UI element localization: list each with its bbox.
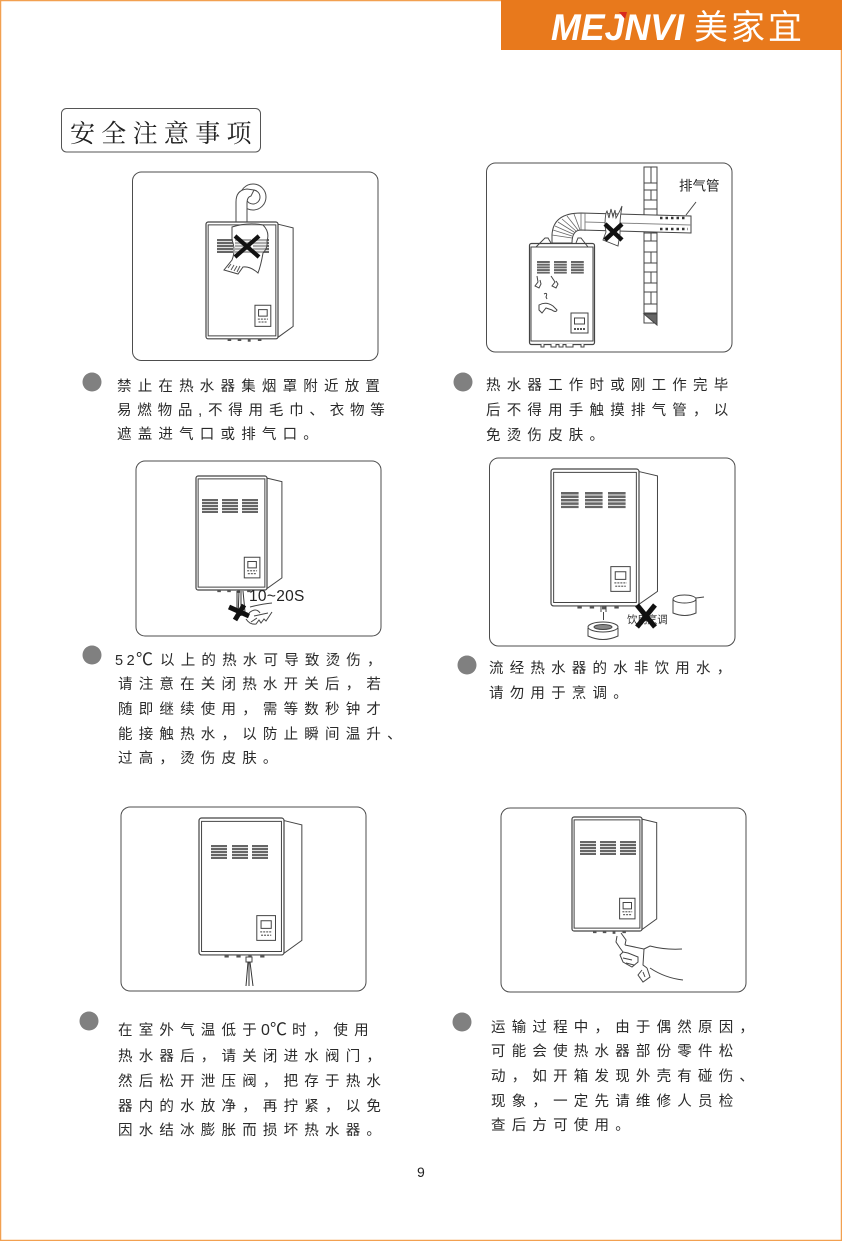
note 6 <box>452 1012 760 1134</box>
note 3: 以上的热水可导致烫伤， <box>160 652 388 669</box>
logo accent <box>619 12 627 19</box>
icon: brick wall <box>644 167 657 325</box>
note 6: 可能会使热水器部份零件松 <box>491 1043 739 1060</box>
note 3: 请注意在关闭热水开关后，若 <box>118 675 387 693</box>
note 6: 现象，一定先请维修人员检 <box>491 1093 739 1110</box>
note 6: 查后方可使用。 <box>491 1117 636 1134</box>
bullet <box>458 656 476 674</box>
icon: prohibition cross <box>605 224 622 240</box>
vents <box>217 239 269 253</box>
note 5: 器内的水放净，再拧紧，以免 <box>118 1098 387 1115</box>
note 5: 然后松开泄压阀，把存于热水 <box>118 1073 387 1090</box>
note 2 <box>454 372 734 444</box>
icon: heater <box>196 476 282 593</box>
note 3 <box>82 646 408 767</box>
vents <box>561 492 626 508</box>
icon: prohibition cross <box>637 605 655 627</box>
note 3: 随即继续使用，需等数秒钟才 <box>118 700 387 718</box>
bullet <box>452 1012 472 1032</box>
bullet <box>82 646 102 664</box>
note 1: 禁止在热水器集烟罩附近放置 <box>117 378 386 395</box>
note 2: 免烫伤皮肤。 <box>486 427 610 444</box>
note 2: 后不得用手触摸排气管，以 <box>486 402 734 419</box>
icon: draining water <box>246 957 253 986</box>
brand header <box>501 0 842 50</box>
icon: flue <box>236 184 266 222</box>
note 3: ℃ <box>136 650 153 669</box>
vents <box>211 845 268 859</box>
note 4: 流经热水器的水非饮用水， <box>489 660 737 677</box>
icon: heater <box>572 817 657 934</box>
note 3: 能接触热水，以防止瞬间温升、 <box>118 726 408 743</box>
icon: bowl <box>588 622 618 640</box>
drinking cooking label: 饮用 <box>627 613 648 626</box>
icon: burn marks <box>535 276 558 313</box>
icon: heater <box>551 469 657 609</box>
note 5: 在室外气温低于 <box>118 1022 263 1039</box>
note 5: 热水器后，请关闭进水阀门， <box>118 1048 387 1065</box>
bullet <box>454 372 472 392</box>
icon: pot <box>673 595 704 616</box>
vents <box>580 841 636 855</box>
note 1 <box>82 372 391 443</box>
title box <box>62 108 260 152</box>
vents <box>202 499 258 513</box>
icon: heater <box>206 222 293 342</box>
icon: prohibition cross <box>229 605 249 620</box>
page number: 9 <box>417 1164 425 1180</box>
header orange band <box>501 0 842 50</box>
note 5 <box>80 1012 387 1139</box>
note 2: 热水器工作时或刚工作完毕 <box>486 377 734 394</box>
panel 4: not for drinking: 烹调 <box>647 613 668 626</box>
bullet <box>82 372 102 392</box>
icon: exhaust pipe <box>552 213 691 243</box>
note 4: 请勿用于烹调。 <box>489 684 634 702</box>
icon: tap <box>601 606 606 620</box>
note 5: 0 <box>261 1022 270 1039</box>
panel 5: drain in frost <box>121 807 366 991</box>
note 6: 运输过程中，由于偶然原因， <box>491 1019 760 1036</box>
note 5: 时，使用 <box>292 1022 375 1039</box>
logo chinese name: 美家宜 <box>694 9 805 47</box>
icon: prohibition cross <box>235 236 259 257</box>
note 1: 易燃物品,不得用毛巾、衣物等 <box>117 401 391 419</box>
icon: towel <box>224 224 268 274</box>
icon: water stream <box>237 591 245 618</box>
panel 3: hot water delay <box>136 461 381 636</box>
note 3: 过高，烫伤皮肤。 <box>118 750 284 767</box>
panel 2: do not touch exhaust <box>486 163 732 352</box>
title box: 安全注意事项 <box>70 120 258 148</box>
panel 6: transport damage <box>501 808 746 992</box>
icon: heater <box>199 818 302 958</box>
note 1: 遮盖进气口或排气口。 <box>117 426 324 443</box>
bullet <box>80 1012 98 1030</box>
icon: hand <box>246 603 272 624</box>
note 5: ℃ <box>270 1020 287 1039</box>
icon: hand and wrench <box>616 933 683 982</box>
icon: heater front <box>530 238 594 347</box>
note 5: 因水结冰膨胀而损坏热水器。 <box>118 1122 387 1139</box>
exhaust label: 排气管 <box>679 178 720 194</box>
logo wordmark: MEJNVI <box>551 7 685 48</box>
panel 4: not for drinking <box>490 458 735 646</box>
label leader <box>686 202 696 215</box>
note 3: 52 <box>115 653 138 669</box>
panel 1: do not cover heater <box>132 172 378 360</box>
note 6: 动，如开箱发现外壳有碰伤、 <box>491 1068 760 1085</box>
note 4 <box>458 656 737 702</box>
delay label: 10~20S <box>249 588 305 605</box>
icon: hand <box>603 206 622 246</box>
